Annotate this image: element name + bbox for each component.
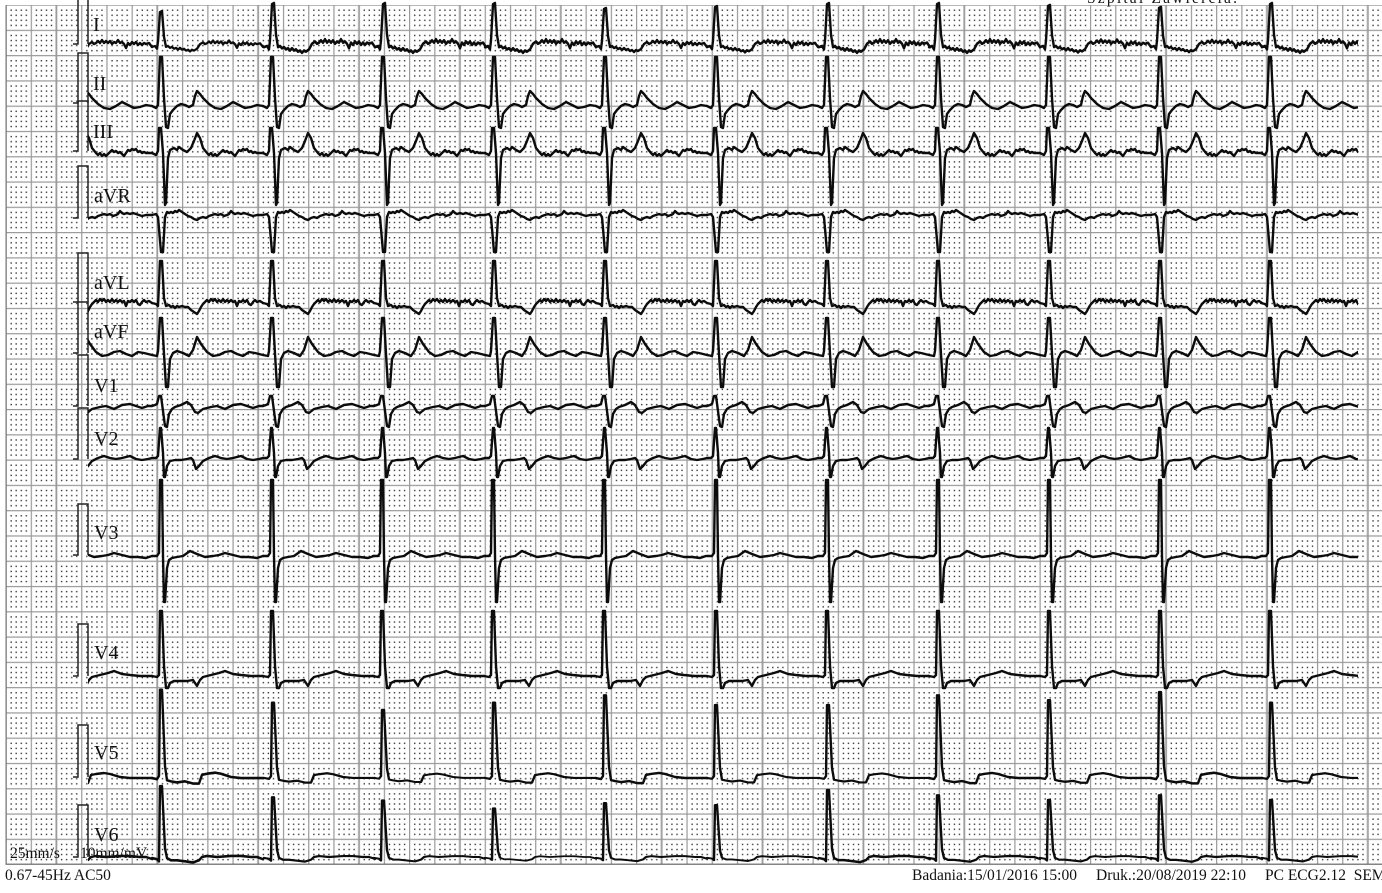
lead aVF trace [41,318,1372,387]
lead II trace [41,57,1372,128]
lead labels: V2 [94,428,118,450]
lead III trace [41,128,1372,205]
lead labels: aVL [94,272,130,294]
lead labels: I [93,14,100,36]
lead labels: III [93,121,113,143]
lead labels: II [93,73,106,95]
lead labels: V1 [94,375,118,397]
lead V5 trace [41,690,1373,784]
exam date: Badania:15/01/2016 15:00 [912,867,1077,884]
calibration pulses [73,0,88,857]
filter settings: 0.67-45Hz AC50 [5,867,111,884]
lead V3 trace [41,480,1372,602]
lead aVR trace [41,210,1372,252]
software version: PC ECG2.12 SEM [1265,867,1382,884]
lead labels: V4 [94,642,118,664]
lead V2 trace [41,428,1372,477]
lead labels: V3 [94,522,118,544]
lead V6 trace [41,786,1373,862]
lead I trace [41,3,1373,53]
lead labels: V5 [94,742,118,764]
lead labels: aVF [94,321,128,343]
gain: 10mm/mV [80,845,148,862]
lead V4 trace [41,611,1372,688]
lead V1 trace [41,396,1372,427]
paper speed: 25mm/s [10,845,60,862]
lead labels: aVR [94,185,131,207]
lead aVL trace [41,261,1372,314]
print date: Druk.:20/08/2019 22:10 [1096,867,1246,884]
lead labels: V6 [94,824,118,846]
lead labels [93,14,131,846]
